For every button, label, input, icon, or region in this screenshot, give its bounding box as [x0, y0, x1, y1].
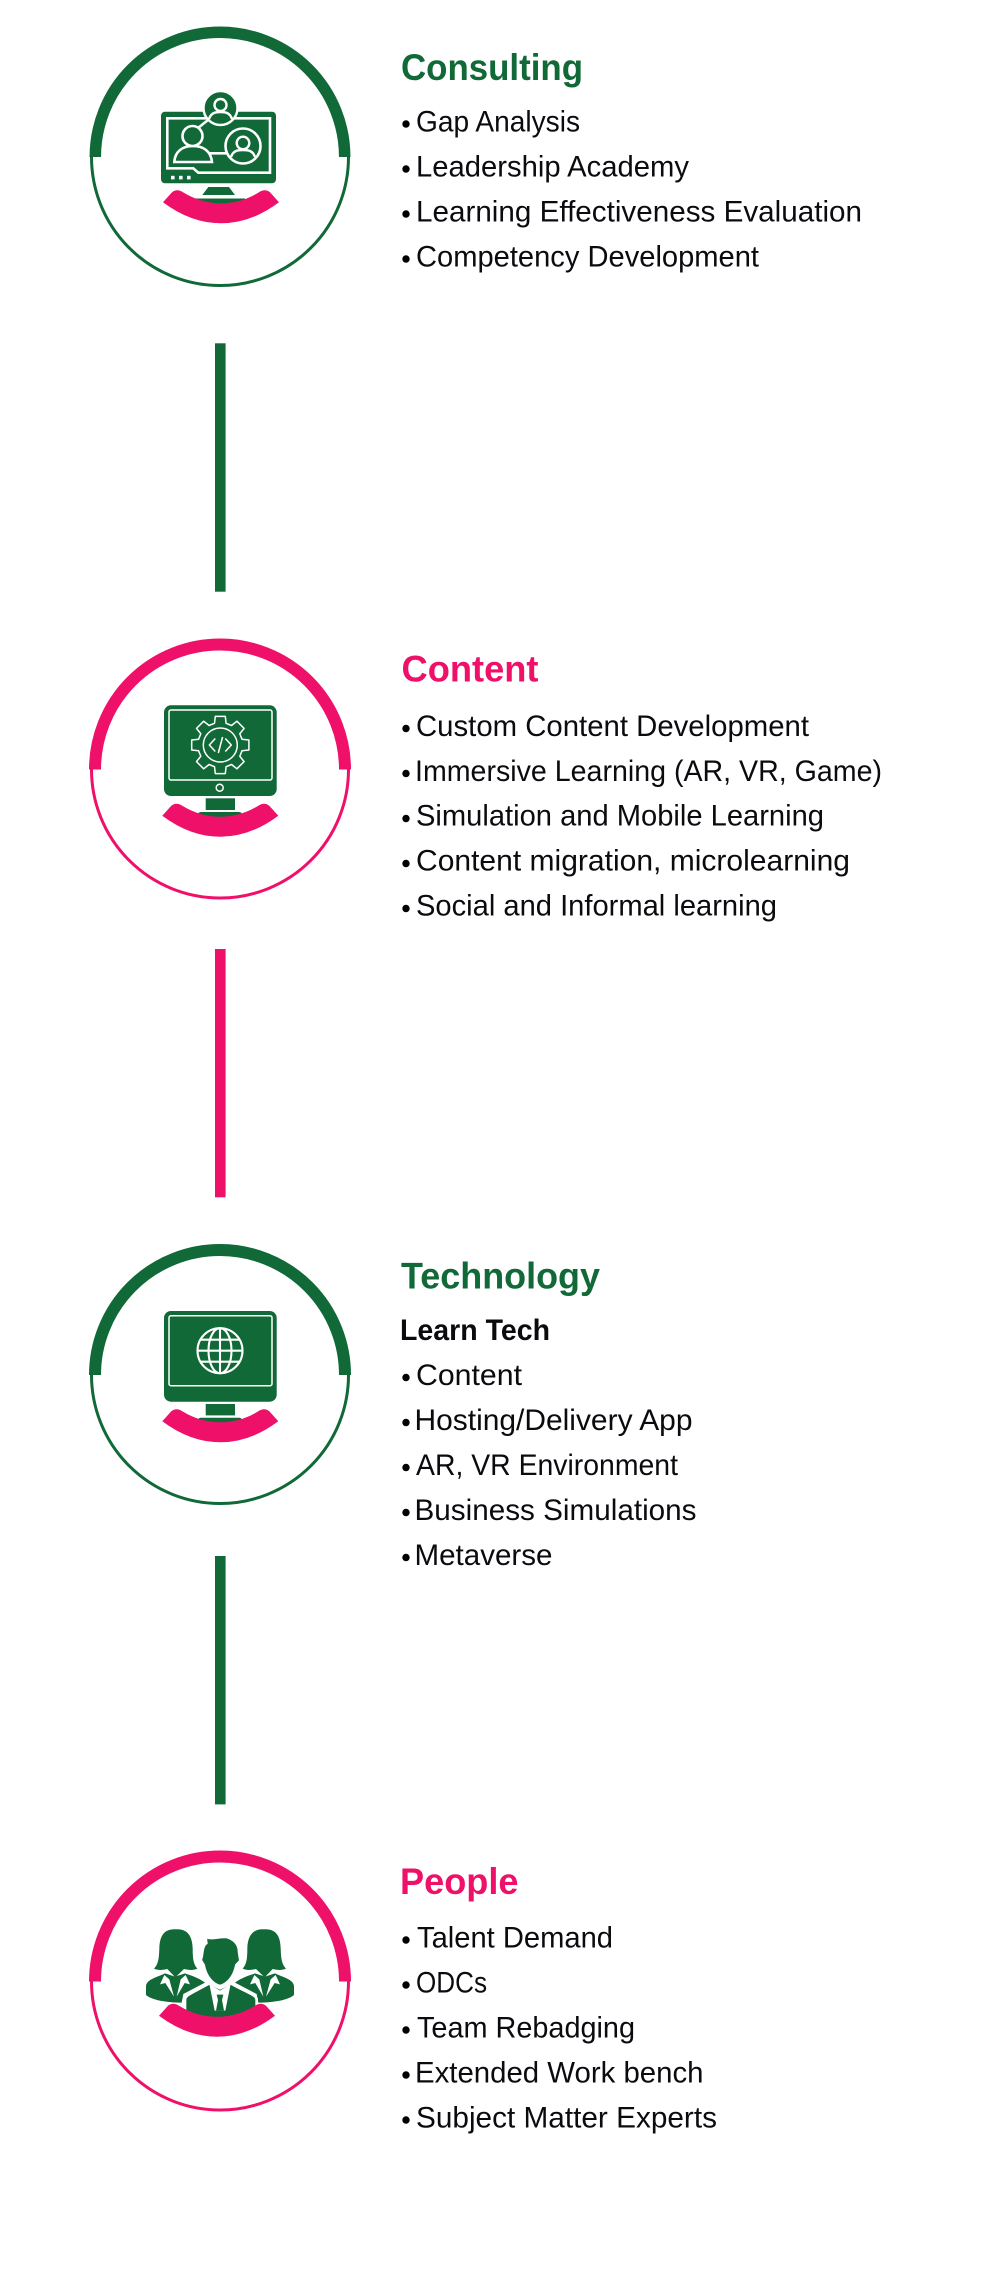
list: consulting services: Leadership Academy [416, 151, 689, 184]
list: consulting services: Gap Analysis [416, 106, 580, 139]
thick top arc [95, 32, 345, 157]
icon: pink smile arc [159, 2004, 275, 2037]
icon: pink smile arc [163, 190, 279, 223]
thick top arc [95, 1857, 345, 1982]
list: people services: Talent Demand [417, 1921, 613, 1954]
icon: monitor with connected people [161, 91, 276, 204]
list: technology services: Metaverse [414, 1539, 552, 1572]
list: technology services: Hosting/Delivery App [414, 1404, 692, 1437]
connector: green line 2 [215, 1556, 226, 1804]
circle ring [92, 28, 348, 286]
panel: consulting text [401, 47, 862, 274]
list: technology services: AR, VR Environment [416, 1449, 679, 1482]
icon: pink smile arc [162, 804, 278, 837]
list: content services: Custom Content Development [416, 710, 810, 743]
circle ring [92, 1853, 348, 2110]
thick top arc [95, 1250, 345, 1375]
list: people services: ODCs [416, 1966, 487, 1999]
panel: technology icon badge [92, 1246, 348, 1504]
panel: content text [402, 649, 882, 923]
list: content services: Simulation and Mobile Learning [416, 800, 824, 833]
panel: people text [400, 1861, 717, 2134]
connector: green line 1 [215, 343, 226, 592]
list: technology services [402, 1359, 696, 1572]
icon: monitor with gear and code [164, 705, 277, 818]
panel: technology text [400, 1255, 696, 1572]
connector: pink line [215, 949, 226, 1197]
circle ring [92, 1246, 348, 1504]
list: people services: Extended Work bench [415, 2056, 704, 2089]
panel: consulting icon badge [92, 28, 348, 286]
list: content services: Content migration, microlearning [416, 845, 850, 878]
heading: consulting: Consulting [401, 47, 583, 88]
list: content services: Social and Informal learning [416, 890, 777, 923]
circle ring [92, 641, 348, 898]
thick top arc [95, 644, 345, 770]
list: people services [402, 1921, 717, 2134]
heading: technology: Technology [401, 1255, 600, 1296]
panel: people icon badge [92, 1853, 348, 2110]
icon: three business people [146, 1929, 294, 2020]
list: consulting services [402, 106, 862, 274]
list: consulting services: Competency Development [416, 241, 760, 274]
list: people services: Team Rebadging [417, 2011, 635, 2044]
list: technology services: Content [416, 1359, 523, 1392]
list: technology services: Business Simulations [414, 1494, 696, 1527]
heading: content: Content [402, 649, 538, 690]
icon: pink smile arc [162, 1409, 278, 1442]
panel: content icon badge [92, 641, 348, 898]
list: consulting services: Learning Effectiveness Evaluation [416, 196, 862, 229]
list: people services: Subject Matter Experts [416, 2101, 717, 2134]
icon: monitor with globe [164, 1311, 277, 1424]
heading: people: People [400, 1861, 518, 1902]
list: content services [402, 710, 882, 923]
list: content services: Immersive Learning (AR, VR, Game) [415, 755, 882, 788]
subheading: learn tech: Learn Tech [400, 1314, 550, 1347]
